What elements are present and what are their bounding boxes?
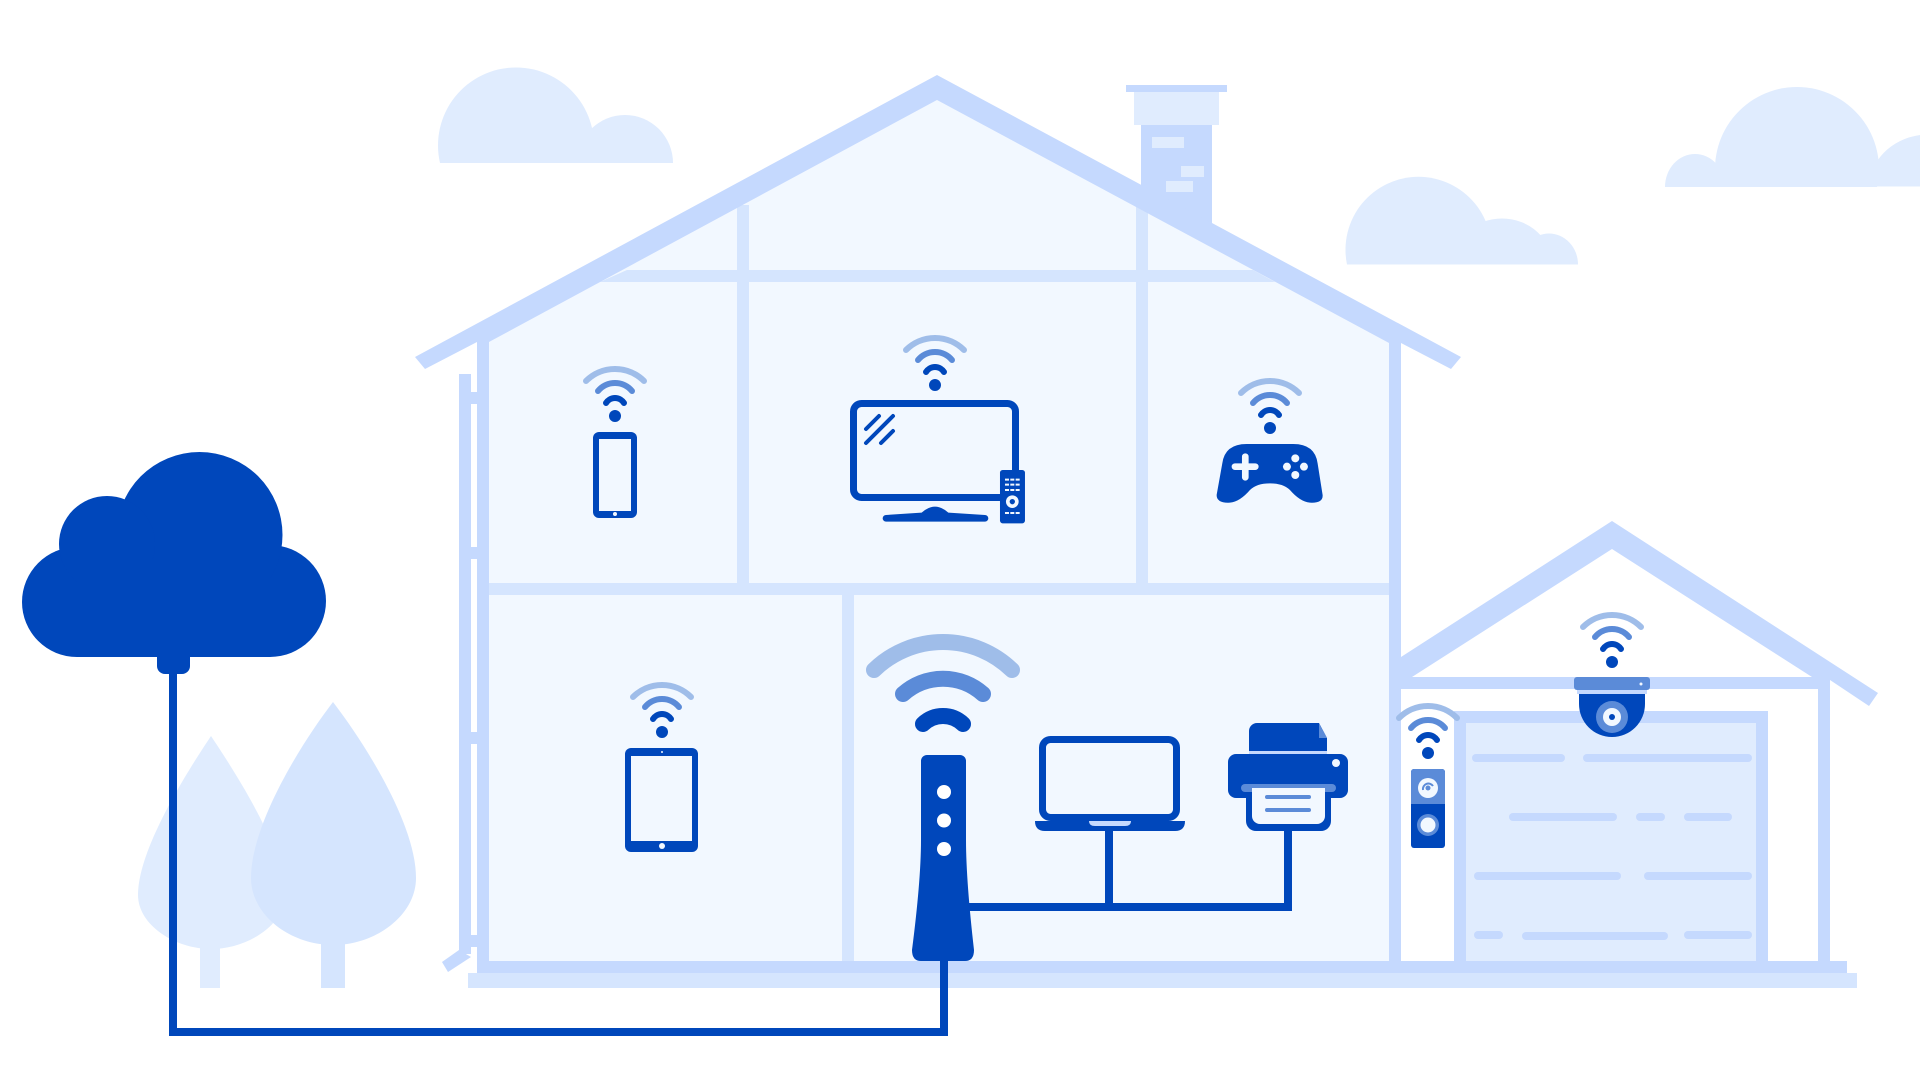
interior walls [489, 205, 1389, 961]
garage roof [1401, 521, 1878, 706]
icon: printer [1228, 723, 1348, 831]
garage door [1454, 711, 1768, 961]
icon: router [912, 755, 974, 961]
wired connection [960, 830, 1288, 907]
cloud: top right [1665, 87, 1920, 187]
icon: video doorbell [1411, 769, 1445, 848]
cloud: top left [438, 67, 673, 163]
icon: laptop [1035, 740, 1185, 831]
icon: game controller [1217, 444, 1323, 503]
chimney [1126, 85, 1227, 235]
wifi: security camera [1583, 615, 1641, 668]
tree: front [251, 702, 416, 988]
house outer walls [477, 342, 1401, 962]
downpipe [442, 374, 477, 972]
internet cable [173, 660, 944, 1032]
house interior [489, 100, 1389, 961]
wifi: phone [586, 369, 644, 422]
internet cloud [22, 452, 326, 674]
tree: back [138, 736, 285, 988]
wifi: video doorbell [1399, 706, 1457, 759]
icon: phone [593, 432, 637, 518]
house roof [415, 75, 1461, 369]
icon: television [854, 404, 1016, 522]
wifi: television [906, 338, 964, 391]
icon: tablet [625, 748, 698, 852]
icon: security camera [1574, 677, 1650, 737]
wifi: router [874, 642, 1012, 724]
wifi: tablet [633, 685, 691, 738]
icon: remote control [1000, 470, 1025, 523]
wifi: game controller [1241, 381, 1299, 434]
cloud: middle right [1346, 177, 1578, 264]
floor [468, 961, 1857, 988]
garage structure [1401, 677, 1830, 961]
